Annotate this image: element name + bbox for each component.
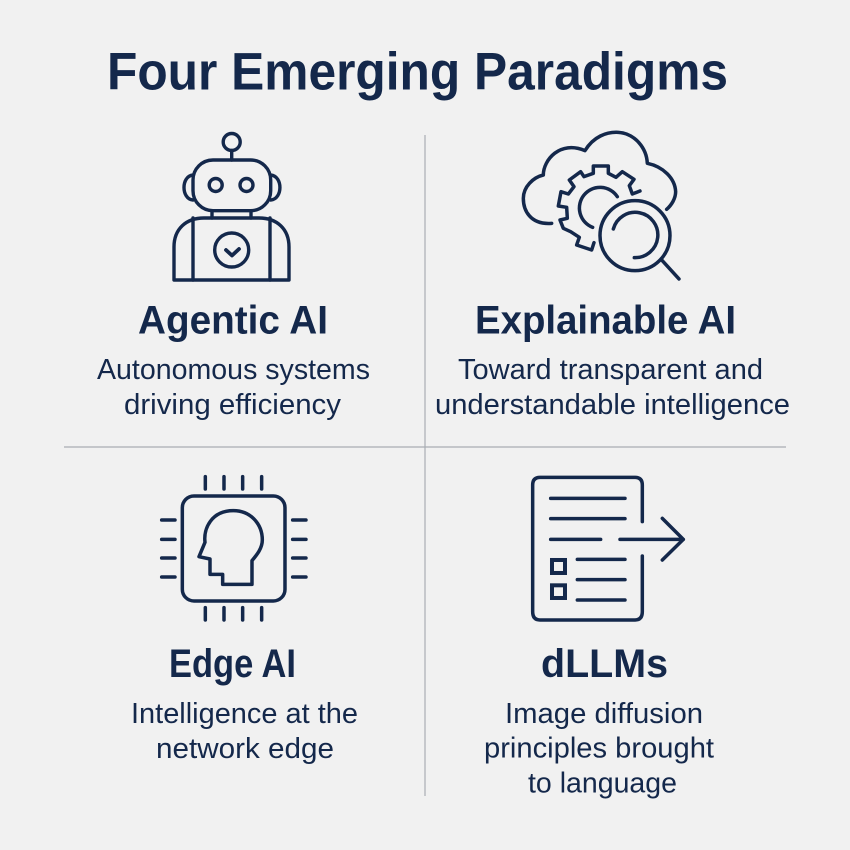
description: dLLMs: to language	[528, 768, 677, 800]
description: dLLMs: principles brought	[484, 732, 714, 764]
description: Agentic AI: driving efficiency	[124, 389, 342, 421]
description: dLLMs	[484, 698, 714, 800]
icon: robot	[174, 134, 289, 280]
description: Edge AI: Intelligence at the	[131, 698, 358, 730]
heading: Edge AI: Edge AI	[169, 642, 296, 686]
title: Four Emerging Paradigms	[107, 42, 728, 101]
panel: Edge AI	[131, 477, 358, 765]
heading: dLLMs: dLLMs	[541, 642, 668, 686]
description: Explainable AI: Toward transparent and	[458, 354, 763, 386]
description: Explainable AI	[435, 354, 790, 421]
description: dLLMs: Image diffusion	[505, 698, 703, 730]
description: Edge AI: network edge	[156, 733, 334, 765]
description: Agentic AI	[97, 354, 370, 421]
icon: chip with head	[162, 477, 306, 620]
description: Explainable AI: understandable intelligence	[435, 389, 790, 421]
description: Agentic AI: Autonomous systems	[97, 354, 370, 386]
panel: Agentic AI	[97, 134, 370, 421]
heading: Agentic AI: Agentic AI	[138, 298, 328, 342]
heading: Explainable AI: Explainable AI	[475, 298, 736, 342]
icon: cloud, gear and magnifier	[523, 132, 679, 279]
description: Edge AI	[131, 698, 358, 765]
panel: dLLMs	[484, 477, 714, 800]
panel: Explainable AI	[435, 132, 790, 421]
icon: document with arrow	[533, 477, 683, 620]
